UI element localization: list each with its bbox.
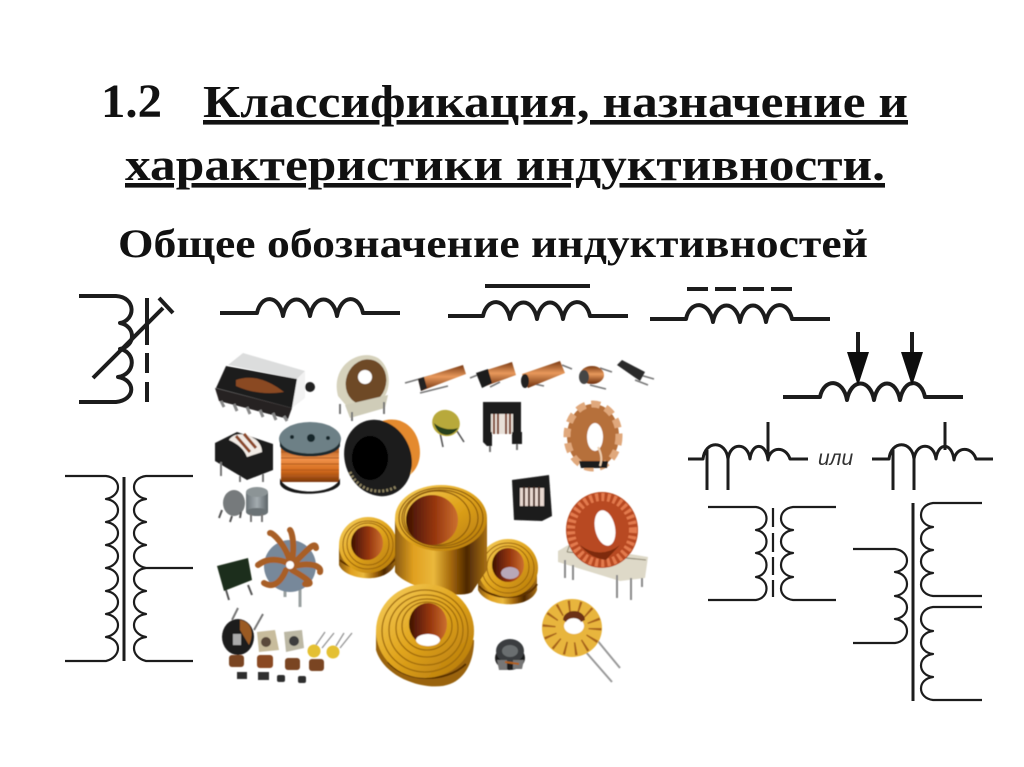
symbol: inductor (220, 299, 400, 316)
component: copper toroid on pins (258, 530, 320, 607)
symbols: schematic notations (65, 286, 993, 701)
symbol: transformer with center tap (65, 476, 193, 661)
title: характеристики индуктивности. (125, 139, 885, 190)
symbol: inductor with two arrows (783, 332, 963, 400)
component: rod inductor row (405, 360, 654, 393)
component: top-left transformer (215, 353, 315, 421)
photo collage: inductor components (215, 353, 654, 686)
component: SMD power inductor (495, 639, 525, 670)
component: small black choke (512, 475, 552, 521)
component: common-mode choke (483, 402, 522, 452)
component: copper bobbin (279, 422, 341, 494)
component: front gold coil (376, 584, 474, 686)
component: large gold coil (395, 485, 487, 595)
symbol: transformer with two secondaries (853, 503, 982, 701)
symbol: variable inductor with core (79, 296, 173, 402)
title (101, 75, 908, 190)
symbol: tapped inductor variant two (872, 422, 993, 490)
title: 1.2 (101, 75, 162, 128)
symbol: tapped inductor variant one (688, 422, 808, 490)
title: Классификация, назначение и (203, 76, 908, 127)
component: small parts cluster (222, 608, 352, 683)
symbol: small transformer with dashed core (708, 507, 836, 600)
component: yellow-green capacitor shape (428, 405, 464, 447)
component: left gold coil (339, 517, 397, 578)
component: dark green capacitor (217, 558, 252, 600)
component: yellow toroid (542, 599, 620, 682)
subtitle: Общее обозначение индуктивностей (118, 221, 868, 266)
component: EE transformer (215, 432, 273, 482)
component: toroid on base (337, 354, 393, 421)
symbol: inductor with dashed core (650, 289, 830, 322)
component: right gold coil (478, 539, 538, 604)
component: black flange bobbin (333, 409, 423, 507)
component: red toroid on base (558, 492, 648, 600)
label: or: или (818, 447, 854, 470)
symbol: inductor with solid core (448, 286, 628, 319)
component: multi-winding toroid (567, 404, 619, 468)
component: grey capacitors (219, 487, 268, 522)
